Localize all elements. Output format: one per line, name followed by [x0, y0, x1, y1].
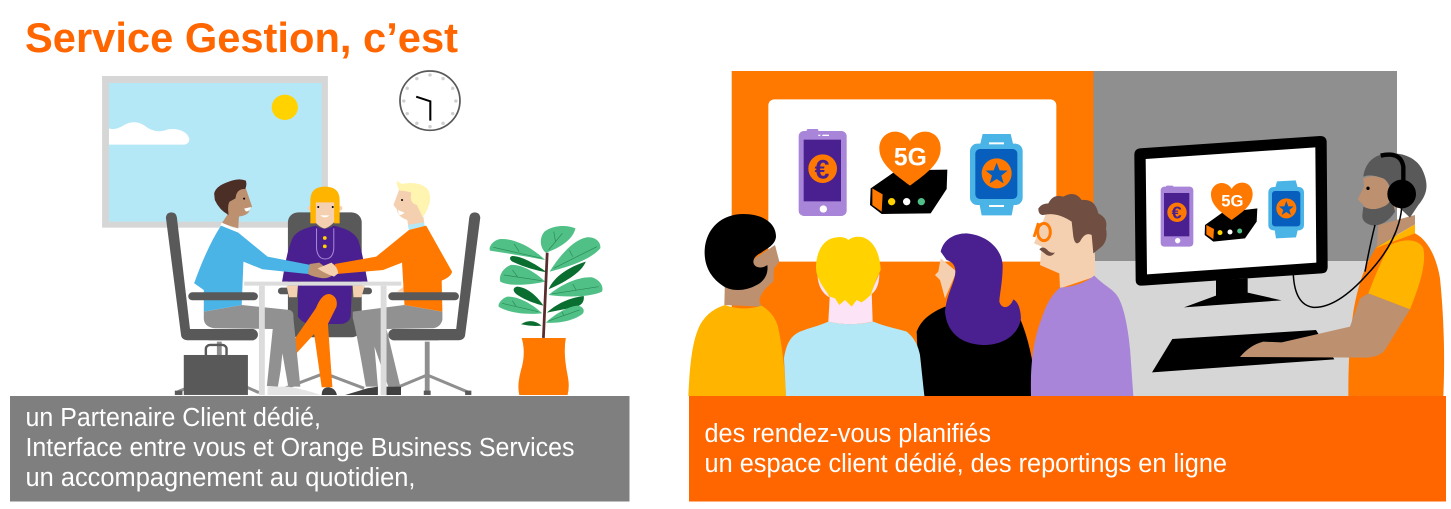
icon: mini smartwatch with star [1268, 180, 1304, 238]
icon: mini phone with euro [1161, 186, 1193, 247]
panel: gray text block: Interface entre vous et Orange Business Services [26, 434, 574, 462]
briefcase [184, 345, 248, 395]
agent wearing headset [1240, 153, 1444, 396]
man in blue shirt [188, 179, 320, 395]
meeting table [244, 282, 401, 395]
icon: mini phone with euro: € [1172, 203, 1182, 223]
icon: mini 5G heart over box [1205, 183, 1257, 242]
potted plant [490, 226, 602, 395]
woman in purple dress [282, 187, 368, 324]
illustration: background wall orange, gray, light gray [732, 71, 1397, 396]
panel: orange text block: un espace client dédié, des reportings en ligne [704, 450, 1227, 478]
person: curly hair, glasses, lilac sweater [1031, 194, 1133, 396]
wall clock [400, 71, 460, 130]
centre chair [278, 212, 372, 388]
icon: mini 5G heart over box: 5G [1221, 191, 1243, 210]
panel: gray text block: un accompagnement au quotidien, [26, 464, 416, 492]
keyboard [1152, 330, 1334, 372]
icon: smartwatch with star [970, 134, 1023, 215]
right chair [385, 212, 480, 395]
icon: 5G heart over box: 5G [894, 145, 927, 172]
woman's crossed orange legs [295, 294, 337, 395]
handshake [308, 263, 338, 278]
window with sky [102, 76, 328, 228]
panel: orange text block [689, 396, 1446, 502]
monitor [1134, 136, 1328, 307]
left chair [166, 212, 259, 395]
person: blond hair, light blue shirt [784, 237, 924, 396]
icon: phone with euro [799, 129, 847, 216]
illustration: audience watching presentation [688, 99, 1133, 396]
person: purple hair, black top [917, 233, 1037, 396]
panel: gray text block: un Partenaire Client dédié, [26, 404, 321, 432]
presentation screen [768, 99, 1056, 262]
icon: 5G heart over box [870, 132, 947, 214]
panel: orange text block: des rendez-vous planifiés [704, 420, 991, 448]
illustration: agent at computer with headset [1134, 136, 1444, 396]
person: back view, yellow shirt [688, 214, 786, 396]
title: Service Gestion, c’est [25, 14, 458, 61]
man in orange sweater [335, 181, 459, 395]
illustration: meeting room [102, 71, 602, 395]
panel: gray text block [10, 396, 630, 502]
icon: phone with euro: € [815, 154, 830, 184]
